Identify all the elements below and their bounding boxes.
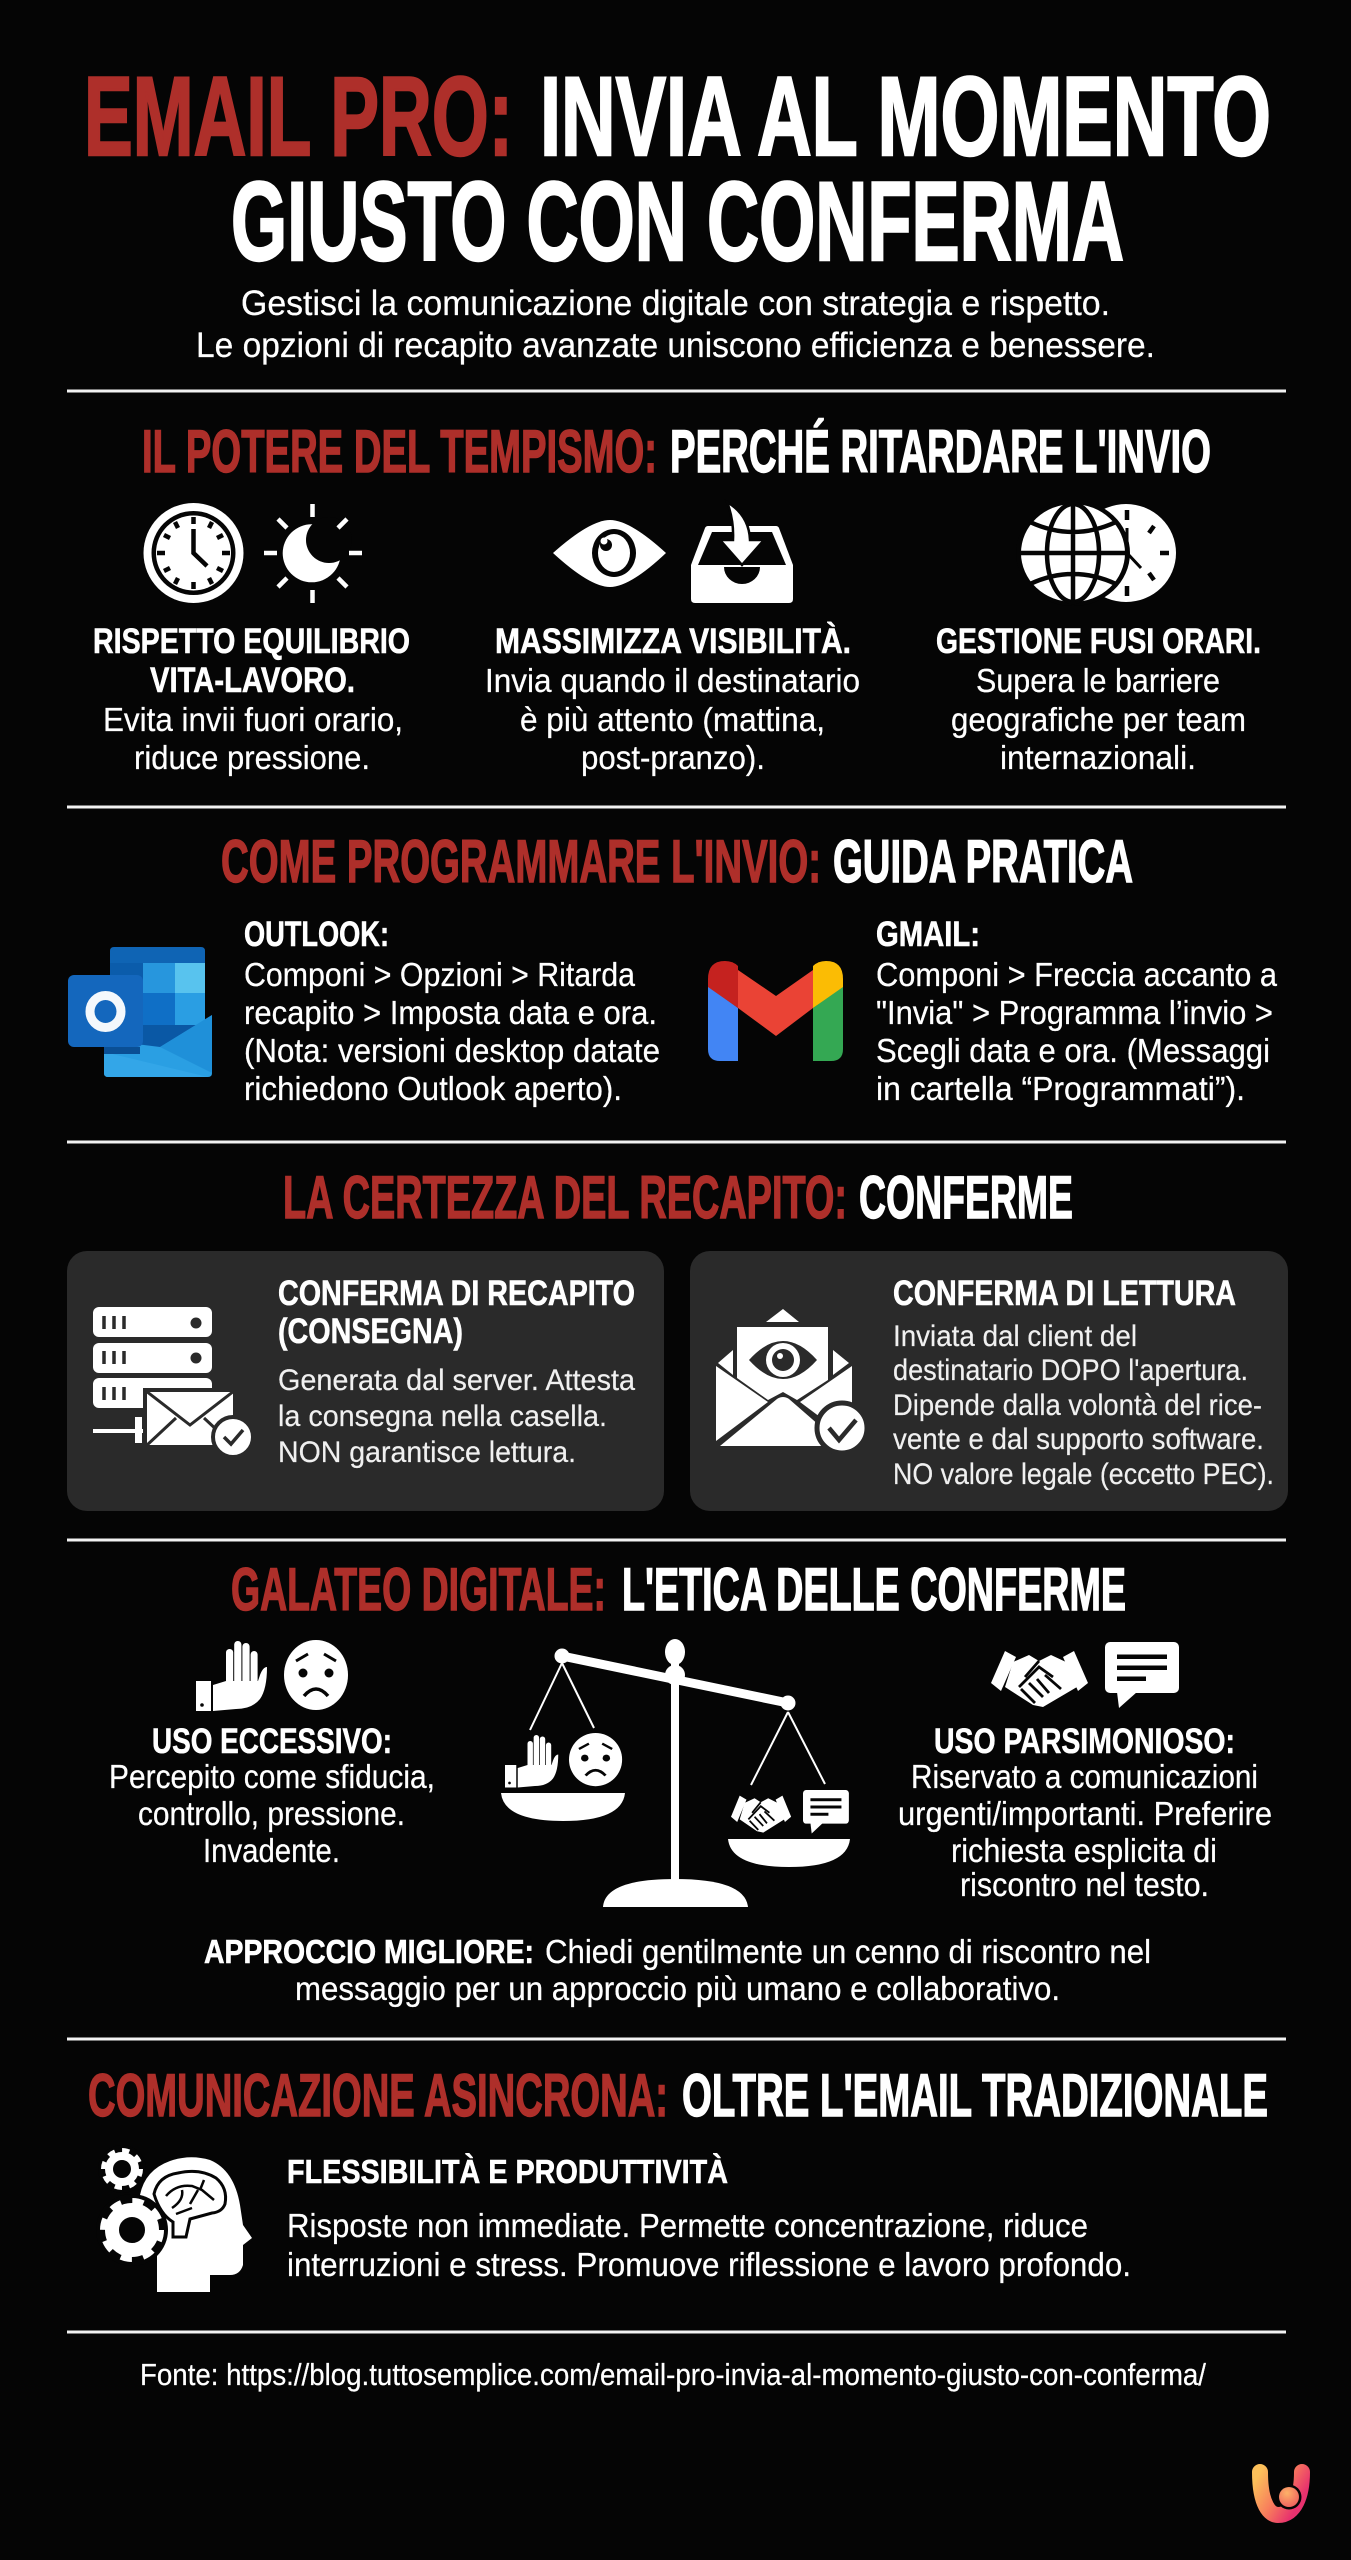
text block: uso parsimonioso (898, 1722, 1272, 1903)
text block: gmail (876, 915, 1278, 1107)
text block: uso eccessivo (109, 1722, 435, 1869)
callout: approccio migliore (204, 1933, 1151, 2007)
source line: Fonte: https://blog.tuttosemplice.com/email-pro-invia-al-momento-giusto-con-conferma/ (140, 2357, 1206, 2392)
text block: uso parsimonioso: Riservato a comunicazioni (911, 1758, 1258, 1795)
panel text: vente e dal supporto software. (893, 1423, 1264, 1456)
panel: conferma di lettura (690, 1251, 1288, 1511)
text block: gmail: "Invia" > Programma l’invio > (876, 994, 1273, 1031)
icon: mini sad face (569, 1733, 622, 1786)
panel text: Inviata dal client del (893, 1320, 1137, 1353)
panel text: la consegna nella casella. (278, 1400, 607, 1433)
text block: equilibrio vita-lavoro: RISPETTO EQUILIBRIO (93, 622, 410, 661)
section heading: asincrona: COMUNICAZIONE ASINCRONA: (88, 2062, 668, 2129)
panel text: NON garantisce lettura. (278, 1436, 576, 1469)
text block: uso parsimonioso: riscontro nel testo. (960, 1866, 1209, 1903)
subtitle (196, 284, 1155, 365)
icon: mini speech bubble (803, 1790, 849, 1834)
section heading: tempismo: IL POTERE DEL TEMPISMO: (142, 418, 657, 485)
panel text: (CONSEGNA) (278, 1312, 463, 1351)
icon: globe with clock (1016, 500, 1176, 606)
icon: stop hand (196, 1641, 267, 1711)
icon: handshake (991, 1651, 1088, 1707)
text block: outlook: Componi > Opzioni > Ritarda (244, 956, 636, 993)
icon: mini stop hand (505, 1735, 558, 1788)
section heading: programmare: COME PROGRAMMARE L'INVIO: (221, 828, 821, 895)
icon: clock (144, 503, 244, 603)
icon: mini handshake (731, 1796, 791, 1833)
text block: visibilita (485, 621, 860, 776)
text block: gmail: GMAIL: (876, 915, 980, 954)
text block: equilibrio vita-lavoro: riduce pressione. (134, 739, 370, 776)
subtitle: Le opzioni di recapito avanzate uniscono efficienza e benessere. (196, 326, 1155, 365)
text block: equilibrio vita-lavoro (93, 622, 410, 776)
panel: conferma di recapito (67, 1251, 664, 1511)
icon: speech bubble (1105, 1642, 1179, 1708)
text block: uso parsimonioso: richiesta esplicita di (951, 1832, 1217, 1869)
text block: uso eccessivo: Percepito come sfiducia, (109, 1758, 435, 1795)
text block: flessibilita (287, 2153, 1131, 2283)
text block: outlook: richiedono Outlook aperto). (244, 1070, 622, 1107)
section heading: programmare: GUIDA PRATICA (833, 828, 1133, 895)
panel text (278, 1274, 635, 1469)
text block: outlook: recapito > Imposta data e ora. (244, 994, 657, 1031)
text block: uso parsimonioso: USO PARSIMONIOSO: (934, 1722, 1235, 1761)
text block: uso eccessivo: USO ECCESSIVO: (152, 1722, 392, 1761)
text block: uso eccessivo: Invadente. (203, 1832, 340, 1869)
text block: visibilita: è più attento (mattina, (520, 701, 825, 738)
callout: approccio migliore: Chiedi gentilmente un cenno di riscontro nel (545, 1933, 1151, 1970)
text block: outlook: OUTLOOK: (244, 915, 389, 954)
text block: fusi orari: Supera le barriere (976, 662, 1220, 699)
text block: uso eccessivo: controllo, pressione. (138, 1795, 405, 1832)
section heading: certezza: LA CERTEZZA DEL RECAPITO: (283, 1164, 847, 1231)
section heading: galateo: GALATEO DIGITALE: (231, 1556, 606, 1623)
icon: inbox (691, 502, 793, 603)
icon: head with brain and gears (96, 2145, 252, 2292)
chart: balance scale (501, 1639, 850, 1907)
icon: sun and moon (264, 504, 362, 603)
title: EMAIL PRO: (84, 54, 513, 179)
text block: visibilita: post-pranzo). (581, 739, 765, 776)
text block: uso parsimonioso: urgenti/importanti. Preferire (898, 1795, 1272, 1832)
text block: fusi orari: internazionali. (1000, 739, 1196, 776)
text block: equilibrio vita-lavoro: VITA-LAVORO. (150, 661, 355, 700)
panel text: Generata dal server. Attesta (278, 1364, 635, 1397)
text block: outlook: (Nota: versioni desktop datate (244, 1032, 660, 1069)
section heading: certezza: CONFERME (859, 1164, 1073, 1231)
text block: equilibrio vita-lavoro: Evita invii fuori orario, (103, 701, 403, 738)
panel text: Dipende dalla volontà del rice- (893, 1389, 1262, 1422)
text block: gmail: Scegli data e ora. (Messaggi (876, 1032, 1270, 1069)
icon: brand logo (1260, 2472, 1302, 2515)
icon: outlook logo (68, 947, 212, 1077)
icon: sad face (284, 1640, 348, 1710)
icon: server with envelope (93, 1307, 253, 1457)
callout: approccio migliore: messaggio per un approccio più umano e collaborativo. (295, 1970, 1060, 2007)
text block: visibilita: MASSIMIZZA VISIBILITÀ. (495, 621, 851, 661)
text block: fusi orari: geografiche per team (951, 701, 1246, 738)
text block: visibilita: Invia quando il destinatario (485, 662, 860, 699)
panel text: NO valore legale (eccetto PEC). (893, 1458, 1274, 1491)
text block: outlook (244, 915, 660, 1107)
text block: gmail: Componi > Freccia accanto a (876, 956, 1278, 993)
text block: gmail: in cartella “Programmati”). (876, 1070, 1245, 1107)
text block: fusi orari: GESTIONE FUSI ORARI. (936, 622, 1261, 661)
icon: eye (553, 520, 666, 587)
subtitle: Gestisci la comunicazione digitale con strategia e rispetto. (241, 284, 1110, 323)
callout: approccio migliore: APPROCCIO MIGLIORE: (204, 1933, 534, 1970)
text block: flessibilita: interruzioni e stress. Promuove riflessione e lavoro profondo. (287, 2246, 1131, 2283)
panel text: CONFERMA DI LETTURA (893, 1274, 1236, 1313)
text block: fusi orari (936, 622, 1261, 776)
icon: gmail logo (708, 961, 843, 1061)
panel text (893, 1274, 1274, 1491)
panel text: CONFERMA DI RECAPITO (278, 1274, 635, 1313)
title (84, 54, 1271, 284)
text block: flessibilita: FLESSIBILITÀ E PRODUTTIVITÀ (287, 2153, 728, 2190)
section heading: galateo (231, 1556, 1126, 1623)
text block: flessibilita: Risposte non immediate. Permette concentrazione, riduce (287, 2207, 1088, 2244)
icon: open envelope with eye (716, 1309, 867, 1453)
panel text: destinatario DOPO l'apertura. (893, 1354, 1248, 1387)
